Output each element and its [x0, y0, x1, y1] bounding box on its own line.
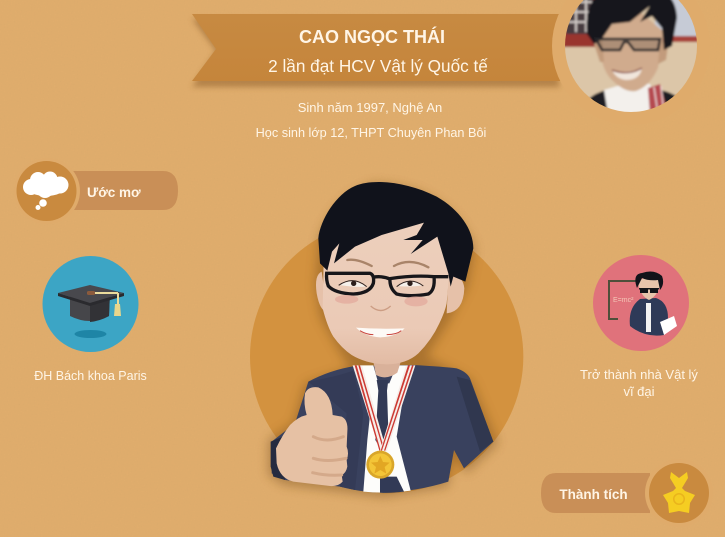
- eyes: [339, 281, 423, 287]
- cheeks: [335, 295, 428, 306]
- tie: [375, 380, 389, 451]
- shirt: [362, 365, 411, 493]
- main character: [250, 182, 523, 497]
- tag circle ring: [645, 459, 713, 527]
- goal: physicist: vĩ đại: [623, 384, 655, 399]
- goal: physicist: [580, 255, 698, 399]
- tag pill: [70, 171, 178, 210]
- face: [323, 220, 449, 364]
- section tag: Ước mơ: [14, 158, 178, 224]
- thumbs-up hand: [271, 387, 348, 486]
- goal: university: [34, 256, 147, 383]
- character shadow: [268, 183, 498, 497]
- tag label: Ước mơ: [87, 185, 141, 200]
- tag circle ring: [14, 158, 80, 224]
- neck: [372, 353, 403, 377]
- icon: teacher at blackboard: [609, 272, 677, 336]
- banner ribbon: [192, 14, 562, 87]
- icon: teacher at blackboard: E=mc²: [613, 297, 634, 304]
- glasses: [327, 273, 448, 296]
- tag pill: [541, 473, 650, 513]
- tag label: Thành tích: [559, 487, 628, 502]
- banner subtitle: 2 lần đạt HCV Vật lý Quốc tế: [268, 56, 488, 76]
- tag circle: [16, 161, 76, 221]
- medal: [366, 451, 394, 479]
- tag circle: [649, 463, 709, 523]
- icon: graduation cap: [58, 285, 124, 338]
- school info: Học sinh lớp 12, THPT Chuyên Phan Bôi: [256, 126, 486, 140]
- ears: [316, 272, 464, 313]
- nose: [371, 306, 391, 310]
- portrait photo: [552, 0, 697, 112]
- hair: [318, 182, 473, 287]
- eyebrows: [347, 260, 428, 267]
- section tag: Thành tích: [541, 459, 713, 527]
- icon: thought cloud: [23, 172, 68, 210]
- icon: gold medal: [663, 472, 695, 513]
- goal label: ĐH Bách khoa Paris: [34, 369, 147, 383]
- pink circle: [593, 255, 689, 351]
- medal ribbons: [353, 365, 415, 452]
- birth info: Sinh năm 1997, Nghệ An: [298, 100, 442, 115]
- blue circle: [42, 256, 138, 352]
- goal label: Trở thành nhà Vật lý: [580, 367, 698, 382]
- smile: [356, 328, 405, 337]
- suit: [272, 365, 493, 493]
- banner title: CAO NGỌC THÁI: [299, 26, 445, 47]
- orange circle backdrop: [250, 220, 523, 493]
